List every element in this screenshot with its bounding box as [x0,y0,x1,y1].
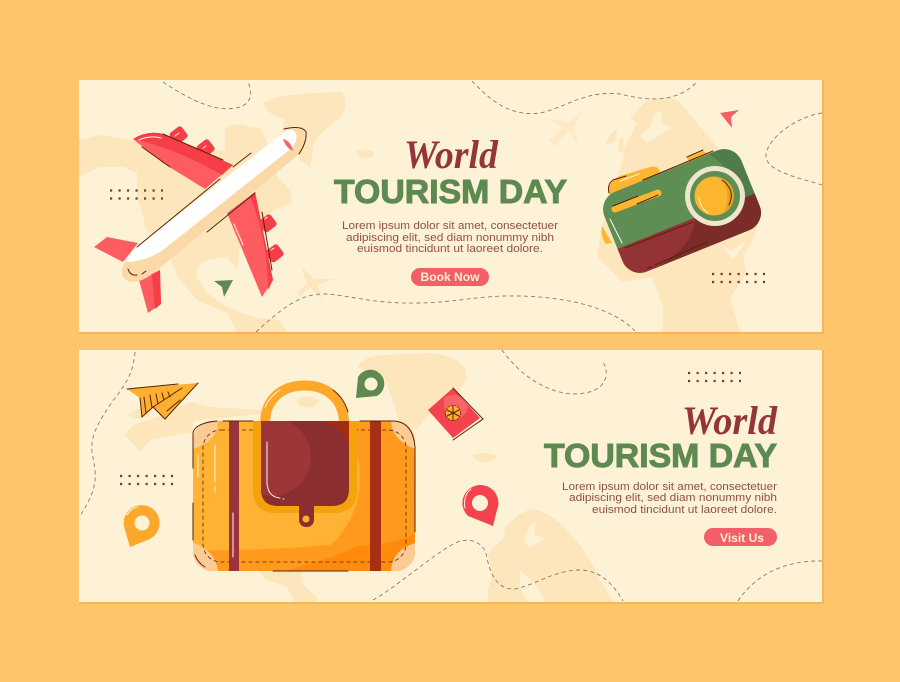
button: Visit Us [704,528,777,546]
text block: Lorem ipsum dolor sit amet, consectetuer [562,481,777,493]
panel: top banner [79,80,824,334]
icon: faint plane [549,112,582,147]
suitcase flap [261,421,349,506]
camera viewfinder bar [615,193,658,209]
suitcase body [193,421,415,571]
icon: passport [428,388,483,440]
text block: euismod tincidunt ut laoreet dolore. [592,504,777,516]
plane lower wing [227,192,273,297]
plane upper wing [133,133,233,189]
suitcase handle [265,386,344,424]
plane tail [94,237,138,262]
icon: faint plane small [297,266,335,300]
dashed route lines [80,350,822,601]
text block [342,220,558,255]
suitcase flap border [253,421,357,513]
text block [562,481,777,516]
dots left [110,190,163,198]
dots right [712,274,765,282]
icon: red arrow [720,110,739,128]
title: World: World [682,398,778,443]
text block: adipiscing elit, sed diam nonummy nibh [569,492,777,504]
suitcase outlines [193,421,415,571]
camera buttons [602,150,709,244]
icon: yellow map pin [124,505,160,547]
dots right [688,373,741,381]
camera outlines [613,151,713,268]
heading: Tourism Day: TOURISM DAY [544,437,777,474]
suitcase clasp [299,498,314,527]
suitcase highlights [198,442,284,557]
button: Visit Us: Visit Us [720,531,764,545]
panel: bottom banner [79,350,824,604]
dashed route lines [163,81,822,332]
button: Book Now: Book Now [420,270,480,284]
text block: Lorem ipsum dolor sit amet, consectetuer [342,220,558,232]
plane fuselage [122,129,304,282]
text block: adipiscing elit, sed diam nonummy nibh [346,232,554,244]
button: Book Now [411,268,489,286]
icon: green map pin [356,370,384,398]
title: World: World [404,132,499,177]
camera lens [685,166,745,226]
camera highlight [610,219,622,243]
plane highlights [139,133,274,250]
illustration: camera [602,149,761,273]
illustration: airplane [94,125,306,313]
world map background [79,92,760,332]
text block: euismod tincidunt ut laoreet dolore. [357,243,543,255]
heading: Tourism Day: TOURISM DAY [334,173,567,210]
icon: red map pin [462,485,498,526]
plane outlines [128,128,306,275]
icon: green arrow [214,280,233,297]
suitcase stitching [203,430,406,562]
dots left [120,476,173,484]
illustration: suitcase [176,386,415,571]
camera body [603,149,761,273]
icon: paper plane [127,383,198,419]
plane engines [168,125,285,263]
world map background [125,353,614,602]
